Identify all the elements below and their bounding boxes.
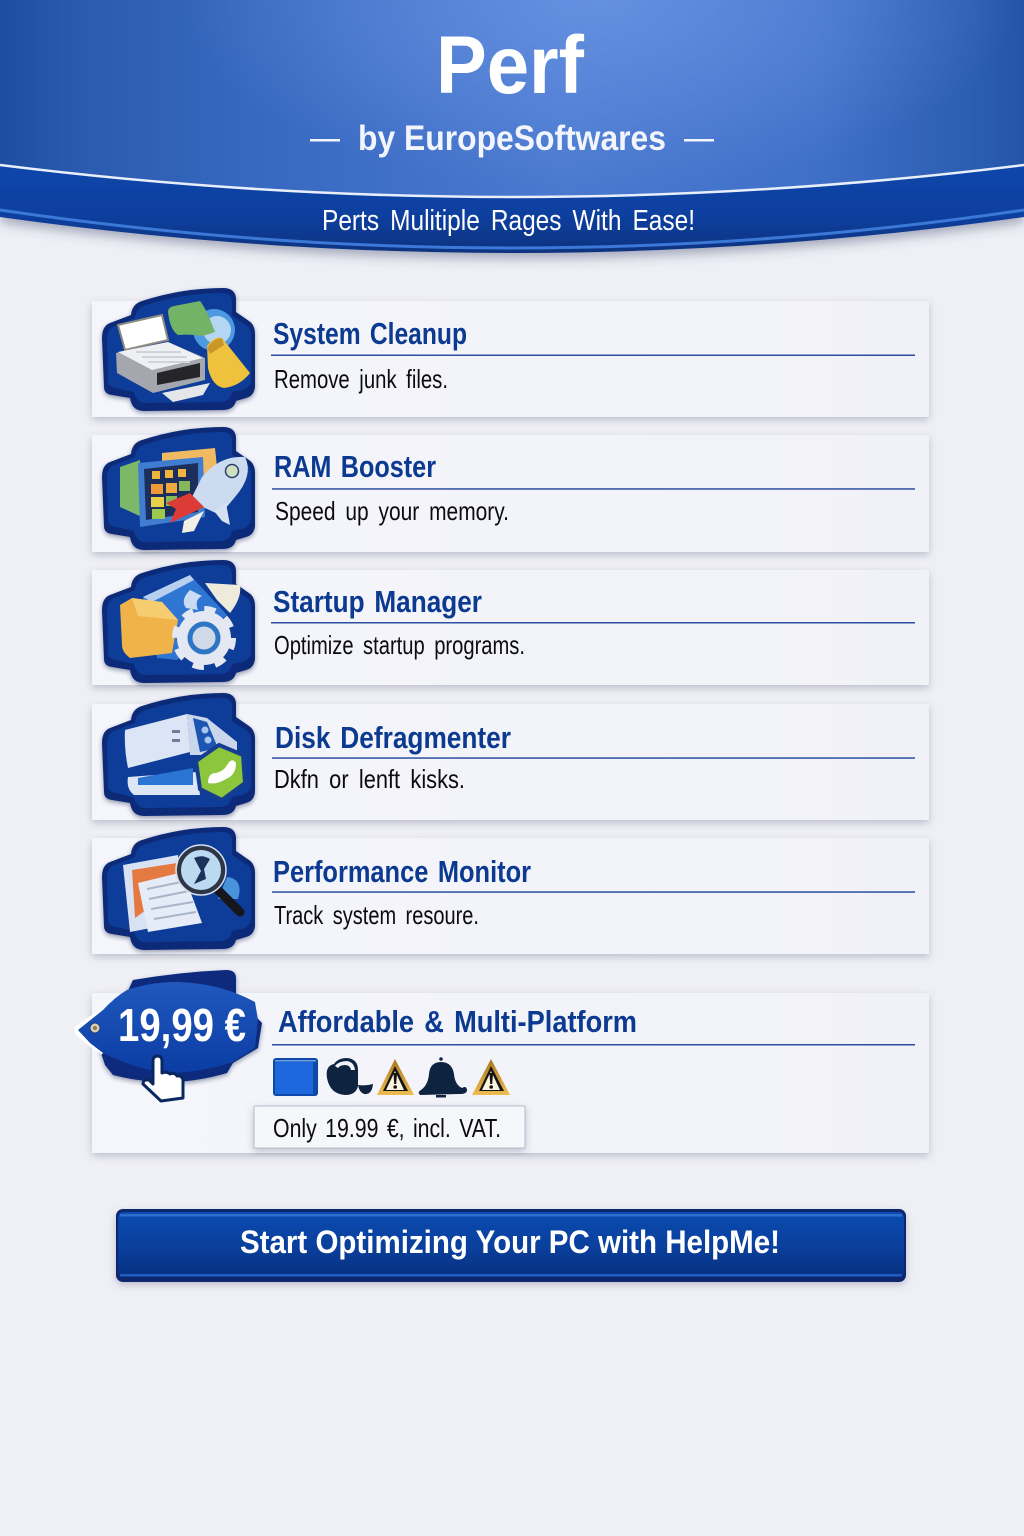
tagline: Perts Mulitiple Rages With Ease! xyxy=(322,205,695,237)
price tag xyxy=(76,970,262,1101)
icon: folder and gear xyxy=(102,560,255,683)
description: Track system resoure. xyxy=(274,900,479,930)
heading: RAM Booster xyxy=(274,449,436,484)
icon: documents and magnifier xyxy=(102,827,255,950)
description: Dkfn or lenft kisks. xyxy=(274,764,465,794)
icon: bell xyxy=(419,1057,467,1098)
panel: Startup Manager xyxy=(92,560,929,685)
ribbon band xyxy=(0,160,1024,253)
title: Perf xyxy=(436,20,585,111)
heading: System Cleanup xyxy=(273,316,467,351)
panel: Performance Monitor xyxy=(92,827,929,954)
subtitle: by EuropeSoftwares xyxy=(358,119,666,158)
call-to-action button xyxy=(116,1209,906,1282)
icon: disk drive and shield xyxy=(102,693,255,816)
panel: System Cleanup xyxy=(92,288,929,417)
heading: Affordable & Multi-Platform xyxy=(278,1004,637,1039)
heading: Startup Manager xyxy=(273,584,482,619)
description: Remove junk files. xyxy=(274,364,448,394)
icon: hand cursor xyxy=(143,1056,183,1101)
price tag: 19,99 € xyxy=(118,999,246,1051)
icon: blue window xyxy=(273,1058,318,1096)
panel: RAM Booster xyxy=(92,427,929,552)
panel: Affordable and Multi-Platform xyxy=(76,970,929,1153)
call-to-action button: Start Optimizing Your PC with HelpMe! xyxy=(240,1224,780,1260)
heading: Performance Monitor xyxy=(273,854,531,889)
panel: Disk Defragmenter xyxy=(92,693,929,820)
price note box xyxy=(254,1106,525,1148)
heading: Disk Defragmenter xyxy=(275,720,511,755)
header blue field xyxy=(0,0,1024,197)
header banner xyxy=(0,0,1024,253)
description: Speed up your memory. xyxy=(275,496,509,526)
description: Optimize startup programs. xyxy=(274,630,525,660)
icon: kettle xyxy=(327,1058,373,1095)
icon: memory card and rocket xyxy=(102,427,255,550)
icon: printer and broom xyxy=(102,288,255,411)
price note box: Only 19.99 €, incl. VAT. xyxy=(273,1113,501,1143)
icon: warning triangle xyxy=(472,1059,510,1095)
icon: warning triangle xyxy=(377,1059,414,1095)
